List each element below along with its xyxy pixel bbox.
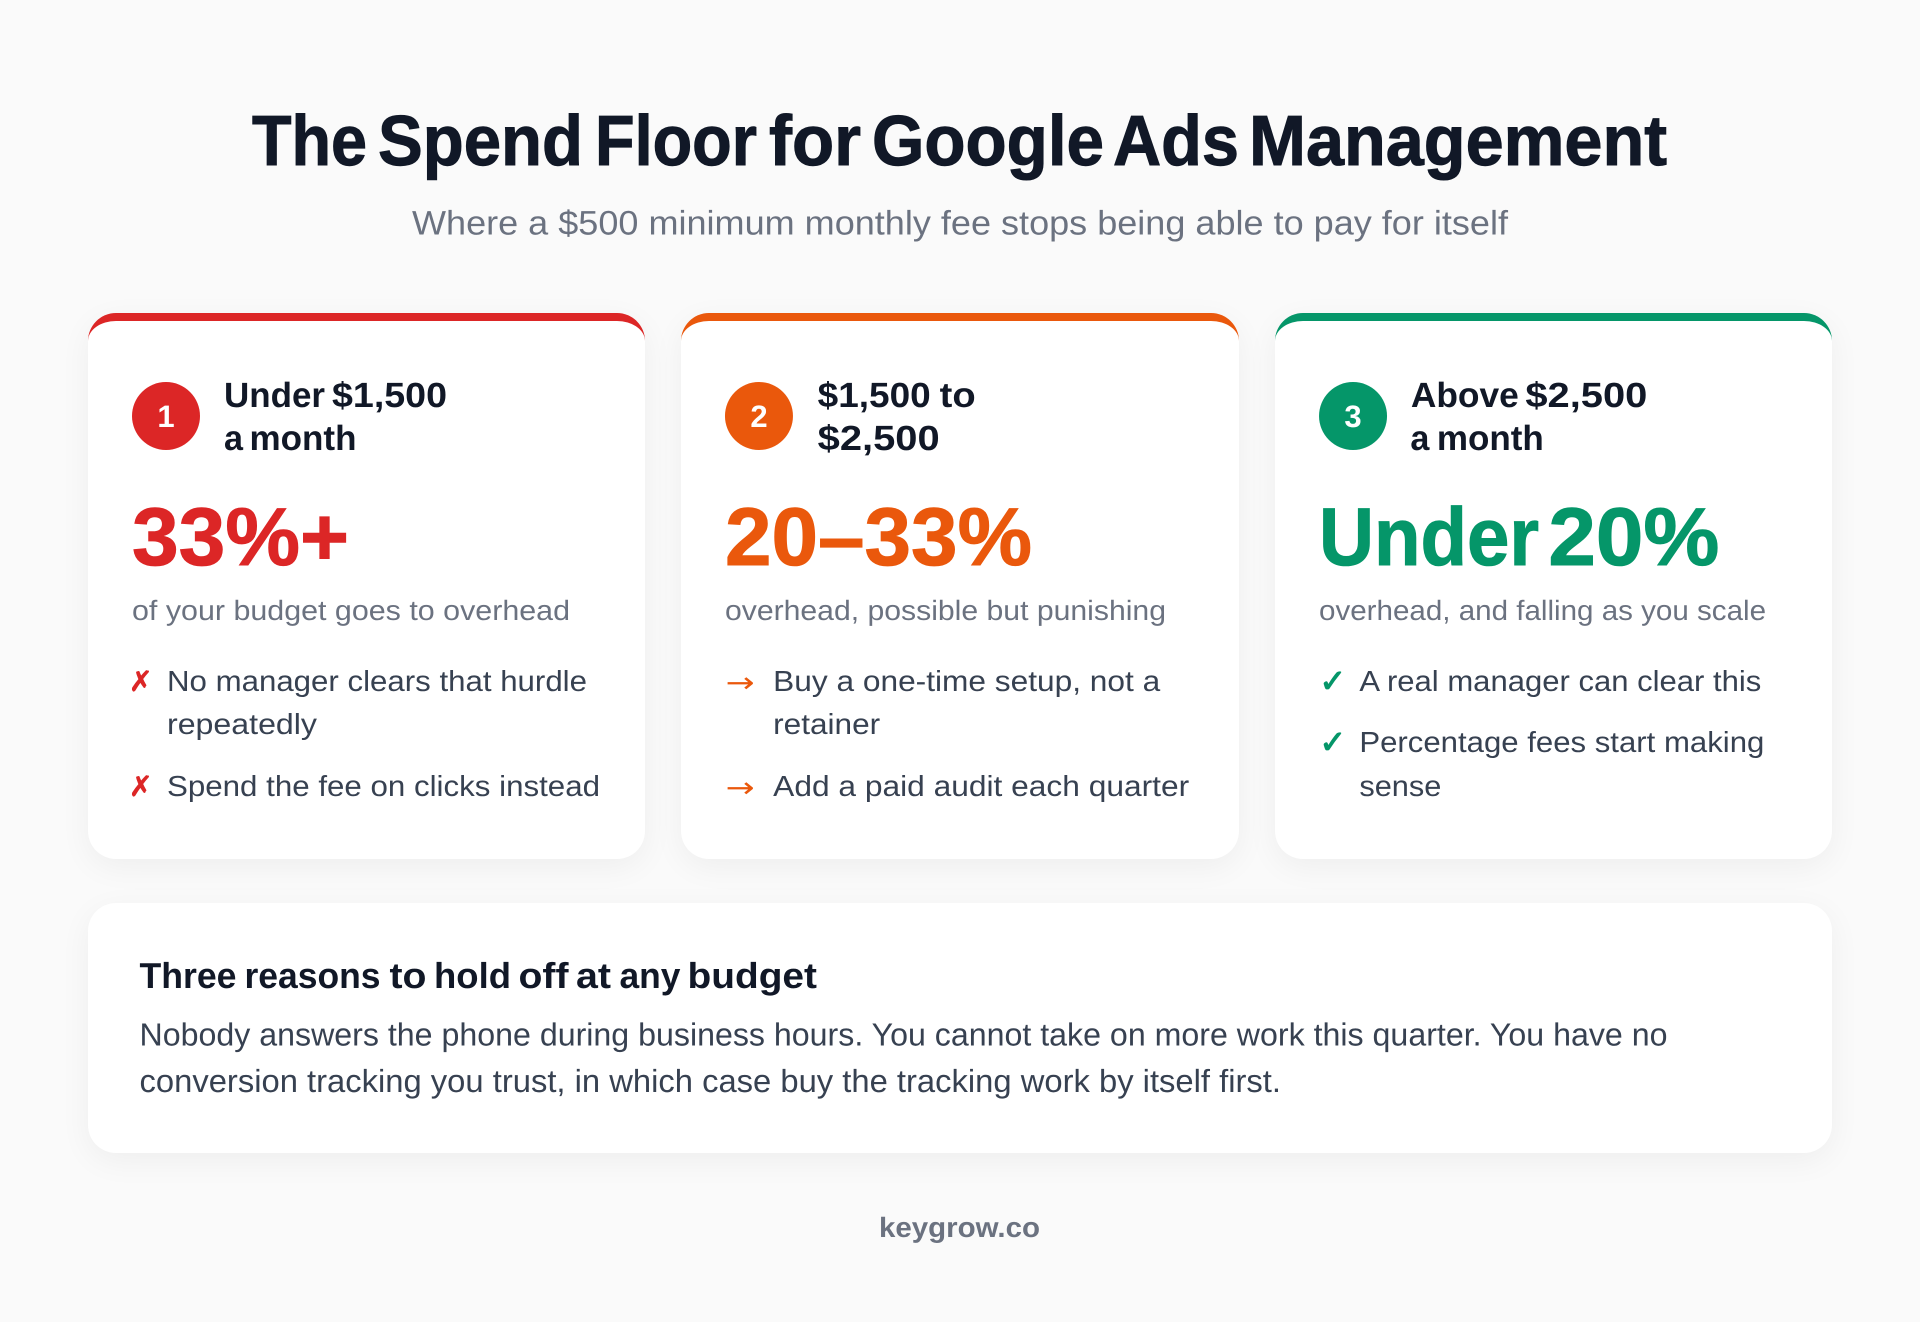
list item: spend the fee: Spend the fee on clicks instead bbox=[167, 771, 600, 803]
title: Floor bbox=[595, 102, 757, 181]
card heading: $1,500 bbox=[818, 376, 931, 415]
card heading: a bbox=[1410, 419, 1430, 458]
panel body: Nobody answers the phone during business hours. You cannot take on more work this quarter. You have no bbox=[140, 1016, 1668, 1052]
list item: no manager: repeatedly bbox=[167, 709, 318, 741]
panel heading: reasons bbox=[244, 955, 380, 996]
title: The bbox=[252, 102, 367, 181]
card heading: Under bbox=[224, 376, 325, 415]
big stat: 33%+ bbox=[132, 492, 349, 583]
big stat: 20% bbox=[1548, 492, 1719, 583]
subtitle: Where a $500 minimum monthly fee stops being able to pay for itself bbox=[412, 204, 1509, 242]
card heading: month bbox=[1436, 419, 1543, 458]
badge 3: 3 bbox=[1344, 399, 1361, 434]
badge 1 bbox=[132, 382, 200, 450]
title: Spend bbox=[378, 102, 583, 181]
list item: one-time setup: → bbox=[726, 666, 755, 699]
panel heading: budget bbox=[688, 955, 817, 996]
panel: above $2,500 a month bbox=[1275, 313, 1832, 859]
badge 2 bbox=[725, 382, 793, 450]
list item: spend the fee: ✗ bbox=[129, 770, 152, 803]
big stat: Under bbox=[1319, 492, 1539, 583]
panel heading: Three bbox=[140, 955, 236, 996]
stat caption: overhead, and falling as you scale bbox=[1319, 595, 1766, 626]
list item: percentage fees: sense bbox=[1359, 771, 1441, 803]
list item: paid audit: → bbox=[726, 771, 755, 804]
title: Ads bbox=[1113, 102, 1239, 181]
badge 3 bbox=[1319, 382, 1387, 450]
big stat: 20–33% bbox=[725, 492, 1032, 583]
panel heading: at bbox=[576, 955, 611, 996]
card heading: a bbox=[224, 419, 244, 458]
list item: percentage fees: Percentage fees start making bbox=[1359, 727, 1764, 759]
card heading: $1,500 bbox=[332, 376, 447, 415]
panel heading: any bbox=[620, 955, 680, 996]
title: Google bbox=[872, 102, 1104, 181]
card heading: $2,500 bbox=[818, 419, 940, 458]
card heading: to bbox=[940, 376, 976, 415]
header bbox=[252, 102, 1667, 242]
list item: one-time setup bbox=[726, 666, 1169, 741]
card heading: $2,500 bbox=[1525, 376, 1647, 415]
panel heading: hold bbox=[434, 955, 511, 996]
panel: three reasons bbox=[88, 903, 1832, 1153]
stat caption: of your budget goes to overhead bbox=[132, 595, 570, 626]
panel: $1,500 to $2,500 bbox=[681, 313, 1239, 859]
panel heading: to bbox=[390, 955, 426, 996]
panel body: conversion tracking you trust, in which case buy the tracking work by itself first. bbox=[140, 1063, 1281, 1099]
list item: no manager: No manager clears that hurdle bbox=[167, 666, 587, 698]
list item: paid audit: Add a paid audit each quarter bbox=[773, 771, 1190, 803]
list item: percentage fees: ✓ bbox=[1319, 723, 1346, 761]
card heading: Above bbox=[1410, 376, 1518, 415]
list item: real manager: A real manager can clear this bbox=[1359, 666, 1761, 698]
list item: one-time setup: Buy a one-time setup, not a bbox=[773, 666, 1161, 698]
footer brand: keygrow.co bbox=[879, 1212, 1040, 1243]
stat caption: overhead, possible but punishing bbox=[725, 595, 1166, 626]
card heading: month bbox=[249, 419, 356, 458]
list item: percentage fees bbox=[1319, 723, 1772, 803]
panel: under $1,500 a month bbox=[88, 313, 645, 859]
list item: no manager: ✗ bbox=[129, 665, 152, 698]
title: Management bbox=[1249, 102, 1667, 181]
list item: real manager: ✓ bbox=[1319, 662, 1346, 700]
title: for bbox=[769, 102, 861, 181]
list item: no manager bbox=[129, 665, 595, 741]
panel heading: off bbox=[518, 955, 570, 996]
badge 2: 2 bbox=[751, 399, 768, 434]
list item: one-time setup: retainer bbox=[773, 709, 881, 741]
badge 1: 1 bbox=[157, 399, 175, 434]
